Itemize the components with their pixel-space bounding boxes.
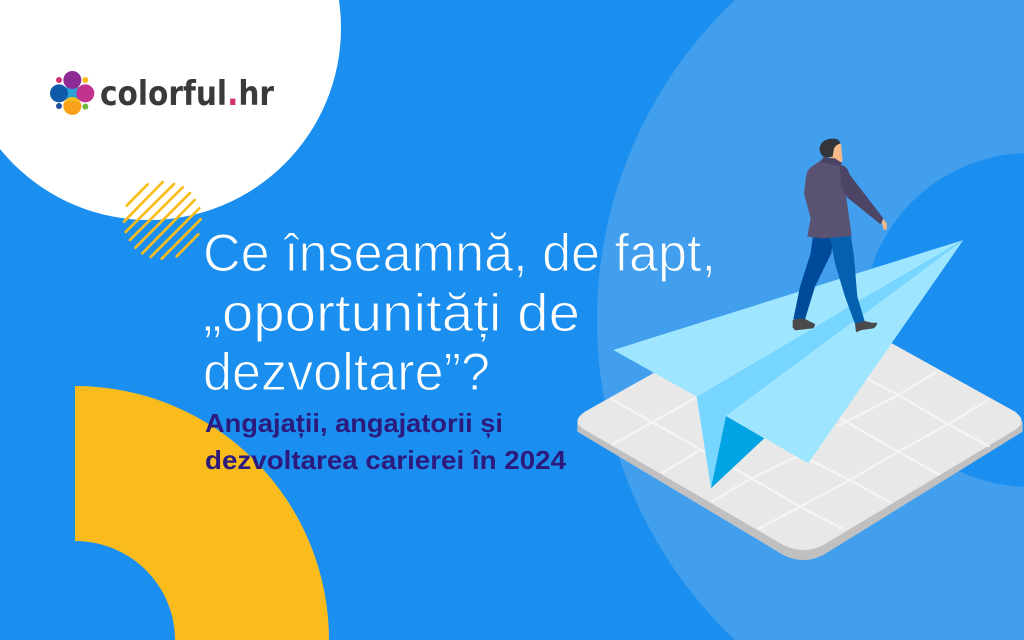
subtitle: Angajații, angajatorii și <box>205 408 503 438</box>
back shoe <box>793 318 815 330</box>
white circle <box>0 0 341 220</box>
front leg <box>830 236 865 324</box>
arm <box>840 166 883 224</box>
large light circle <box>597 0 1024 640</box>
plane centre fold <box>697 240 963 488</box>
platform <box>577 296 1023 560</box>
jacket collar <box>820 157 842 166</box>
hand <box>882 218 887 230</box>
striped yellow circle <box>124 182 201 259</box>
jacket <box>804 161 852 238</box>
title: „oportunități de <box>203 284 580 343</box>
front shoe <box>855 321 877 332</box>
yellow quarter ring <box>75 386 329 640</box>
paper plane <box>613 240 963 488</box>
plane right wing <box>726 240 963 463</box>
platform grid <box>610 372 989 529</box>
logo wordmark: colorful.hr <box>100 74 274 114</box>
title: Ce înseamnă, de fapt, <box>203 224 716 283</box>
plane left wing <box>613 240 963 397</box>
face <box>830 143 843 163</box>
title <box>203 224 716 402</box>
hair <box>820 139 840 158</box>
logo mark <box>50 71 94 115</box>
logo <box>50 71 274 115</box>
platform surface <box>577 296 1022 550</box>
subtitle: dezvoltarea carierei în 2024 <box>205 445 567 475</box>
platform edge <box>577 422 1023 560</box>
title: dezvoltare”? <box>203 343 490 402</box>
subtitle <box>205 408 567 475</box>
person walking <box>793 139 887 332</box>
back leg <box>793 237 833 319</box>
plane keel <box>711 416 764 488</box>
small darker circle <box>863 153 1024 487</box>
